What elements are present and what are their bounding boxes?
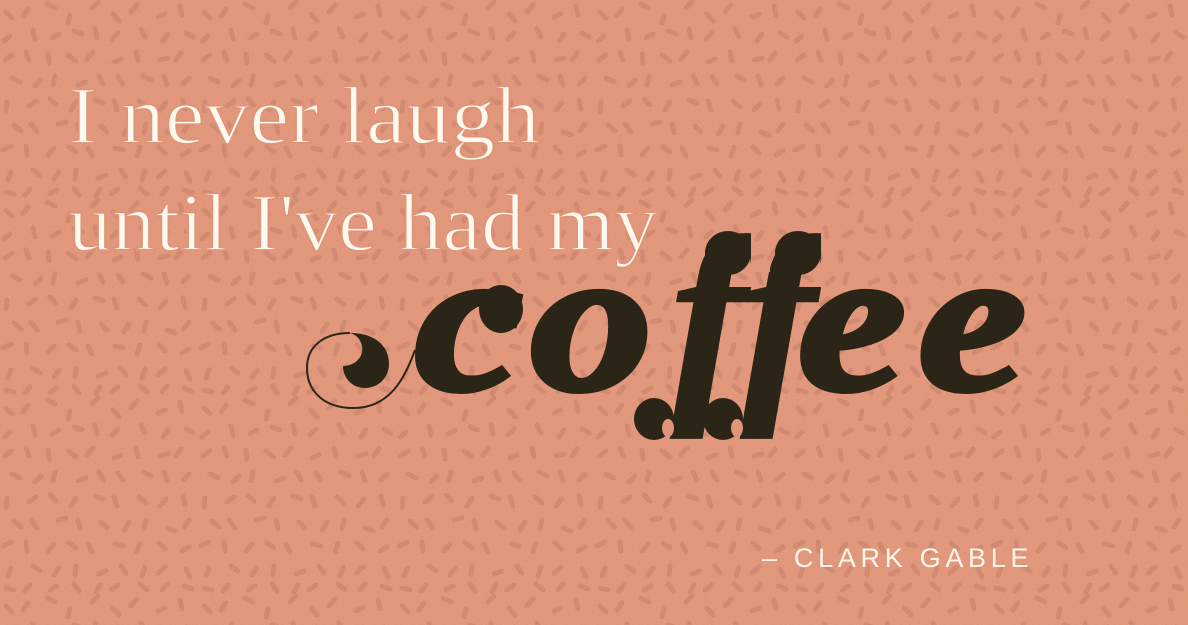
attribution: – CLARK GABLE bbox=[762, 543, 1033, 573]
quote text: first two lines: I never laugh bbox=[68, 70, 540, 161]
ball terminals on the letters f bbox=[634, 231, 821, 440]
display word: coffee: ee bbox=[798, 205, 1026, 434]
ball terminal on the letter c bbox=[479, 285, 523, 333]
swash on the letter c bbox=[307, 333, 415, 408]
quote text: first two lines: until I've had my bbox=[68, 177, 658, 268]
quote text: first two lines bbox=[68, 70, 658, 268]
display word: coffee: co bbox=[415, 205, 652, 434]
display word: coffee: ff bbox=[672, 194, 834, 438]
display word: coffee bbox=[306, 231, 1024, 440]
